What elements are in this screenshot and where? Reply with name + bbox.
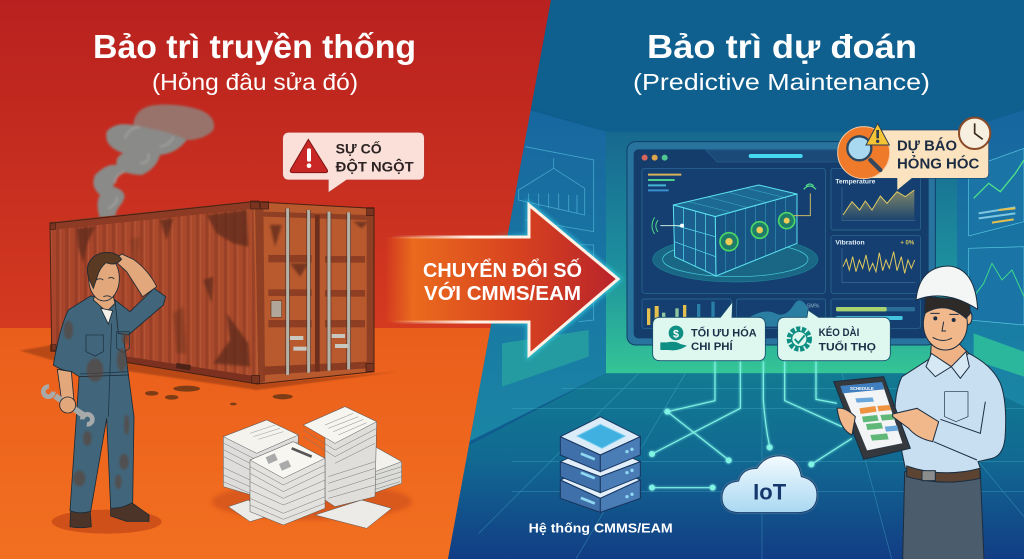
callout text: TỐI ƯU HÓA (691, 326, 757, 340)
left wall (470, 110, 606, 442)
tablet: SCHEDULE (850, 386, 874, 391)
right stack (365, 447, 402, 493)
pockets (80, 323, 129, 417)
trousers (903, 472, 984, 559)
signal leaders (652, 184, 816, 234)
callout text: TUỔI THỌ (819, 341, 876, 354)
callout text (336, 139, 414, 175)
callout text: KÉO DÀI (819, 326, 859, 339)
floor with grid (429, 373, 1024, 559)
temperature chart: Temperature (835, 178, 876, 185)
callout text: ĐỘT NGỘT (336, 158, 414, 175)
forecast text: HỎNG HÓC (897, 155, 980, 173)
title: predictive maintenance: (Predictive Maintenance) (633, 69, 930, 95)
hands (837, 408, 855, 435)
undershirt (101, 308, 113, 324)
panel: predictive maintenance (429, 0, 1024, 559)
icon: clock (959, 118, 990, 149)
vibration chart: Vibration (835, 239, 865, 246)
network connections (649, 362, 852, 491)
wrench (43, 387, 92, 424)
icon: gear check (789, 329, 810, 349)
alert callout (283, 132, 424, 193)
loose paper sheets (228, 500, 392, 528)
tablet (834, 377, 910, 459)
arrow text: CHUYỂN ĐỔI SỐ (423, 258, 582, 282)
arrow text: VỚI CMMS/EAM (424, 281, 581, 305)
engineer with tablet (834, 266, 1006, 559)
neck and face (930, 343, 969, 367)
icon: warning triangle (290, 139, 328, 173)
title: predictive maintenance: Bảo trì dự đoán (647, 28, 917, 65)
vibration chart (831, 236, 920, 293)
oil stains (145, 386, 293, 405)
boots (70, 502, 149, 528)
front stack (250, 442, 325, 525)
title: predictive maintenance (633, 28, 930, 95)
wall panel: lower left (502, 330, 589, 387)
rust patches (77, 210, 368, 367)
door bars (288, 208, 349, 375)
temperature chart (831, 168, 920, 230)
monitor dashboard (627, 142, 935, 345)
face details (933, 316, 956, 322)
panel: traditional maintenance (0, 0, 560, 559)
bottom widgets (642, 299, 920, 328)
server stack (560, 417, 640, 512)
shirt pocket (945, 392, 968, 422)
icon: magnifier badge (838, 127, 890, 179)
digital twin container (673, 185, 797, 276)
forecast text (898, 137, 979, 168)
arrow text (423, 258, 582, 305)
3d view panel (642, 168, 825, 293)
hard hat (916, 266, 978, 309)
digital transformation arrow (385, 205, 618, 355)
callout: cost optimization (653, 302, 765, 361)
sensor markers (720, 213, 795, 251)
wall panel: crane container (519, 147, 594, 322)
collar (926, 352, 969, 378)
back wall (606, 132, 957, 373)
shirt (895, 353, 1006, 474)
belt (907, 466, 980, 482)
callout text (691, 326, 756, 350)
icon: money hand: $ (673, 328, 679, 340)
title: traditional maintenance: Bảo trì truyền thống (93, 28, 416, 65)
sleeve (934, 402, 985, 460)
back stack (222, 420, 298, 497)
ceiling band (531, 0, 551, 108)
server label: Hệ thống CMMS/EAM (529, 522, 673, 536)
icon: warning (866, 123, 889, 145)
forecast text: DỰ BÁO (897, 138, 957, 155)
skin: arms, hands, neck and face (57, 254, 157, 412)
callout text: SỰ CỐ (336, 139, 382, 156)
window dots (642, 155, 668, 161)
smoke (93, 105, 214, 218)
IoT cloud: IoT (753, 479, 787, 504)
platform (652, 244, 818, 282)
rusty shipping container (50, 201, 374, 384)
wall panel: right charts (969, 148, 1024, 377)
container shadow (20, 345, 398, 390)
paper stacks (212, 407, 412, 528)
title: traditional maintenance: (Hỏng đâu sửa đó) (152, 69, 358, 95)
callout text (819, 326, 876, 354)
bottom widgets: SM% (807, 303, 820, 309)
stressed mechanic (43, 252, 166, 534)
right wall (957, 110, 1024, 407)
forecast callout (838, 118, 990, 191)
callout: extend lifespan (778, 310, 890, 361)
tall stack (303, 407, 377, 507)
title: traditional maintenance (93, 28, 416, 95)
callout text: CHI PHÍ (691, 340, 734, 353)
overalls (53, 288, 166, 513)
grease stains (64, 321, 129, 489)
vibration chart: + 0% (900, 240, 915, 246)
IoT cloud (722, 456, 817, 513)
hair (87, 252, 122, 288)
